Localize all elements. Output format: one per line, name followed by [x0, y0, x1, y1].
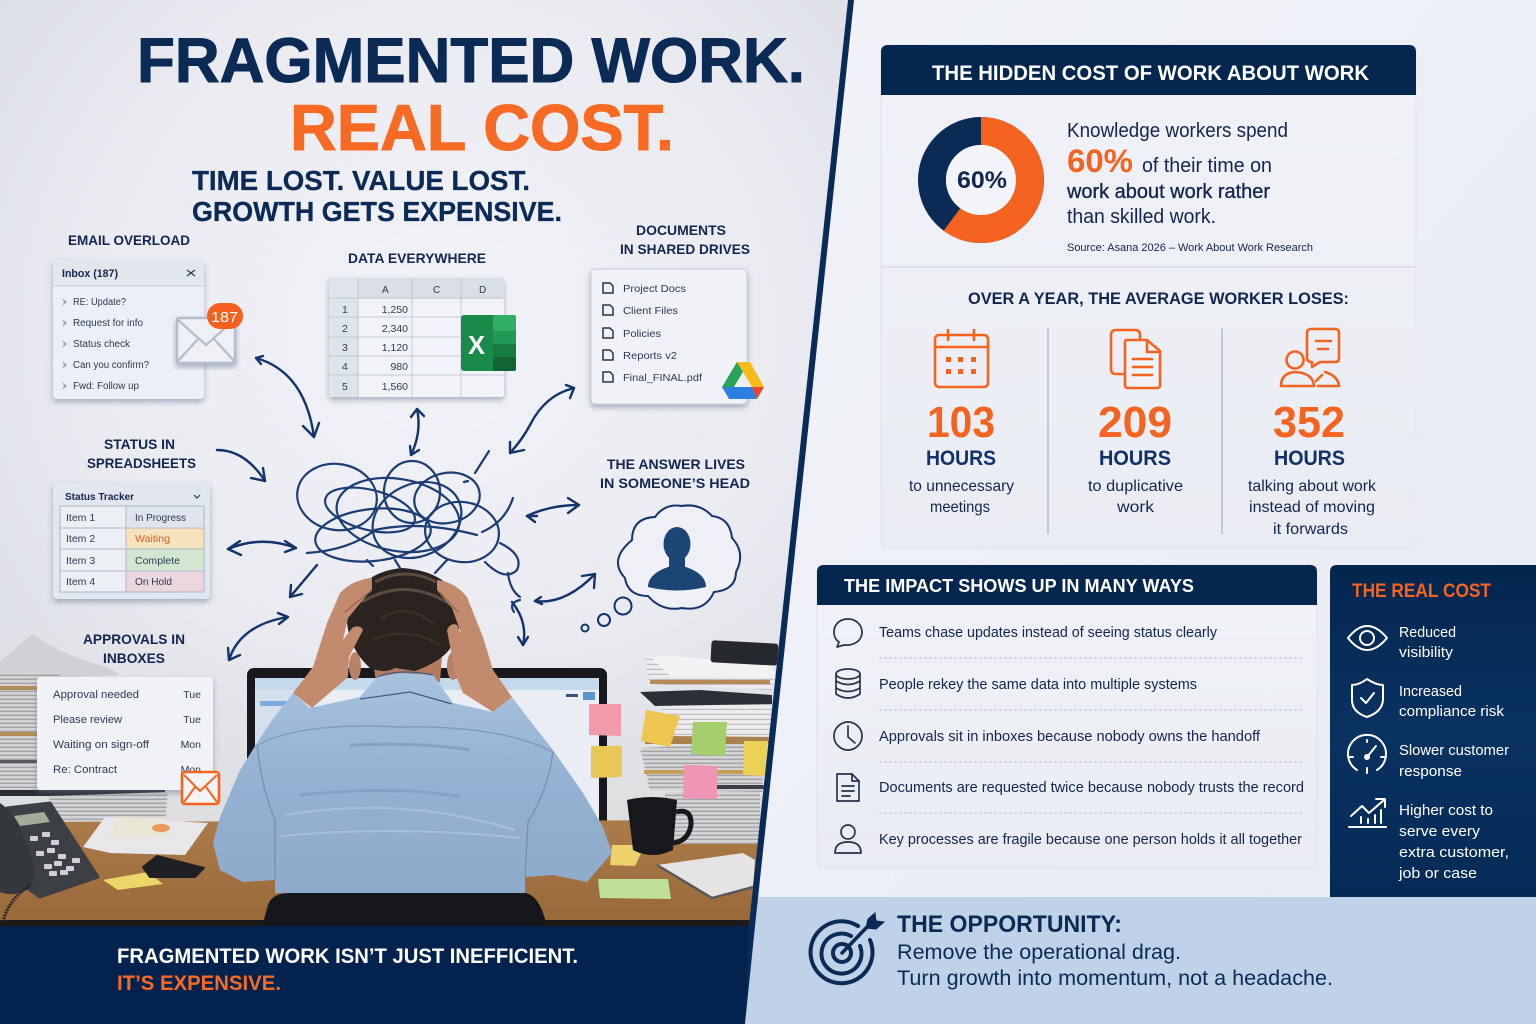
neck and ears	[349, 652, 459, 682]
left hand and forearm	[293, 578, 372, 708]
title	[137, 26, 805, 164]
title: FRAGMENTED WORK.	[137, 26, 805, 96]
illustration: right paper stacks and notebook	[640, 640, 779, 844]
label: the answer lives in someone's head: IN SOMEONE’S HEAD	[600, 475, 750, 491]
label: status in spreadsheets	[87, 440, 196, 468]
stat: 103 hours: to unnecessary	[909, 478, 1014, 495]
panel: shared drive files: Final_FINAL.pdf	[623, 372, 702, 384]
row: key processes	[835, 825, 1302, 853]
panel: spreadsheet: 2	[342, 323, 348, 335]
label: email overload: EMAIL OVERLOAD	[68, 232, 190, 248]
icon: orange envelope	[182, 772, 219, 804]
illustration: notebook	[657, 853, 755, 898]
text: knowledge workers statistic: Source: Asana 2026 – Work About Work Research	[1067, 242, 1313, 254]
panel: the hidden cost of work about work	[881, 45, 1416, 548]
item: increased compliance risk: Increased	[1399, 684, 1462, 700]
panel: the opportunity: Turn growth into momentum, not a headache.	[897, 967, 1333, 990]
label: documents in shared drives: IN SHARED DRIVES	[620, 241, 750, 257]
left panel: fragmented work scene	[0, 0, 848, 926]
bottom banner: left	[0, 926, 750, 1024]
panel: approvals inbox: Tue	[183, 689, 201, 701]
panel: approvals inbox: Mon	[181, 739, 201, 751]
panel: inbox window: Request for info	[73, 318, 143, 329]
text: knowledge workers statistic: than skilled work.	[1067, 206, 1216, 228]
text: knowledge workers statistic: Knowledge workers spend	[1067, 120, 1288, 142]
stat: 209 hours: 209	[1098, 398, 1172, 447]
item: reduced visibility: visibility	[1399, 645, 1454, 661]
illustration: monitor	[247, 668, 607, 820]
panel: inbox window: Fwd: Follow up	[73, 381, 139, 392]
panel: spreadsheet: 2,340	[382, 323, 408, 335]
hair	[347, 568, 461, 671]
chart: 60 percent donut	[932, 131, 1030, 229]
panel: status tracker	[53, 483, 210, 599]
stat: 209 hours: work	[1116, 499, 1155, 516]
item: reduced visibility: Reduced	[1399, 625, 1456, 641]
arrow: knot down	[512, 602, 528, 645]
panel: spreadsheet: 980	[390, 361, 408, 373]
panel: spreadsheet: 5	[342, 381, 348, 393]
arrow: thought bubble	[535, 574, 595, 604]
chart: 60 percent donut: 60%	[957, 167, 1007, 194]
panel: the opportunity: THE OPPORTUNITY:	[897, 911, 1122, 938]
item: reduced visibility	[1348, 625, 1456, 661]
item: higher cost to serve: extra customer,	[1399, 845, 1509, 861]
row: rekey data: People rekey the same data into multiple systems	[879, 677, 1197, 693]
row: chase updates	[834, 619, 1218, 647]
panel: approvals inbox: Mon	[181, 764, 201, 776]
panel: shared drive files	[591, 269, 747, 404]
arrow: knot to status	[228, 541, 296, 555]
item: higher cost to serve	[1349, 799, 1509, 882]
panel: status tracker: Status Tracker	[65, 491, 134, 503]
panel: shared drive files: Policies	[623, 328, 661, 340]
panel: the opportunity	[745, 897, 1536, 1024]
label: approvals in inboxes	[83, 634, 184, 663]
stat: 352 hours	[1248, 329, 1377, 538]
icon: excel logo: X	[468, 330, 486, 360]
panel: status tracker: Item 4	[66, 576, 95, 588]
illustration: office chair	[264, 893, 546, 920]
panel: inbox window: RE: Update?	[73, 297, 126, 308]
item: increased compliance risk: compliance risk	[1399, 704, 1505, 720]
panel: spreadsheet: 1	[342, 304, 348, 316]
panel: spreadsheet: D	[479, 285, 486, 296]
stat: 103 hours: HOURS	[926, 447, 996, 470]
heading: over a year: OVER A YEAR, THE AVERAGE WORKER LOSES:	[968, 289, 1349, 308]
label: data everywhere: DATA EVERYWHERE	[348, 250, 486, 266]
stat: 352 hours: HOURS	[1274, 447, 1345, 470]
shirt	[213, 672, 612, 893]
heading: THE REAL COST	[1352, 581, 1491, 602]
panel: the real cost	[1330, 565, 1536, 897]
label: status in spreadsheets: STATUS IN	[104, 436, 175, 452]
illustration: desk	[0, 820, 770, 927]
panel: approvals inbox: Re: Contract	[53, 764, 117, 776]
panel: the opportunity: Remove the operational drag.	[897, 941, 1181, 964]
illustration: sticky notes	[103, 704, 768, 899]
illustration: desk phone	[0, 803, 98, 922]
arrow: approvals two-way	[228, 613, 288, 660]
bottom banner: left: IT’S EXPENSIVE.	[117, 972, 281, 995]
diagonal divider	[745, 0, 854, 1024]
panel: inbox window	[53, 260, 204, 399]
stat: 209 hours	[1088, 330, 1183, 516]
panel: approvals inbox: Approval needed	[53, 689, 139, 701]
label: approvals in inboxes: APPROVALS IN	[83, 631, 185, 647]
text: knowledge workers statistic	[1066, 120, 1313, 254]
stat: 209 hours: HOURS	[1099, 447, 1171, 470]
panel: approvals inbox: Please review	[53, 714, 122, 726]
arrow: knot to approvals short	[290, 565, 317, 597]
stat: 103 hours: 103	[927, 398, 995, 447]
row: rekey data	[836, 669, 1197, 698]
title: REAL COST.	[290, 91, 674, 164]
item: increased compliance risk	[1352, 679, 1505, 720]
row: documents	[837, 774, 1304, 801]
panel: spreadsheet: 1,560	[382, 381, 408, 393]
text: knowledge workers statistic: of their time on	[1142, 155, 1272, 177]
icon: envelope with 187 badge: 187	[211, 309, 238, 326]
label: documents in shared drives	[620, 226, 750, 254]
stat: 352 hours: instead of moving	[1249, 499, 1375, 516]
item: higher cost to serve: serve every	[1399, 824, 1481, 840]
panel: status tracker: Waiting	[135, 533, 170, 545]
item: higher cost to serve: job or case	[1398, 866, 1477, 882]
row: key processes: Key processes are fragile because one person holds it all together	[879, 832, 1302, 848]
stat: 103 hours	[909, 330, 1014, 516]
illustration: desk papers and wallet	[83, 817, 208, 877]
panel: status tracker: In Progress	[135, 512, 186, 524]
stat: 209 hours: to duplicative	[1088, 478, 1183, 495]
arrow: spreadsheet two-way	[410, 409, 424, 455]
panel: shared drive files: Project Docs	[623, 283, 686, 295]
arrow: documents two-way	[510, 385, 574, 453]
item: slower customer response: response	[1399, 764, 1462, 780]
panel: approvals inbox: Waiting on sign-off	[53, 739, 150, 751]
panel: spreadsheet: 1,250	[382, 304, 408, 316]
row: approvals: Approvals sit in inboxes because nobody owns the handoff	[879, 729, 1261, 745]
row: documents: Documents are requested twice because nobody trusts the record	[879, 780, 1304, 796]
illustration: coffee mug	[627, 797, 691, 855]
subtitle	[192, 165, 562, 227]
icon: thought bubble with person	[582, 505, 740, 632]
panel: the impact shows up in many ways	[817, 565, 1317, 868]
panel: inbox window: Status check	[73, 339, 131, 350]
label: status in spreadsheets: SPREADSHEETS	[87, 455, 196, 471]
panel: approvals inbox: Tue	[183, 714, 201, 726]
text: knowledge workers statistic: 60%	[1067, 143, 1133, 179]
icon: envelope with 187 badge	[177, 303, 243, 363]
heading: THE IMPACT SHOWS UP IN MANY WAYS	[844, 576, 1194, 596]
stat: 352 hours: it forwards	[1273, 521, 1348, 538]
text: knowledge workers statistic: work about work rather	[1066, 181, 1270, 203]
panel: spreadsheet: 4	[342, 361, 348, 373]
panel: approvals inbox	[37, 677, 213, 790]
panel: status tracker: Item 3	[66, 555, 95, 567]
arrow: email to knot	[256, 356, 319, 437]
stat: 352 hours: 352	[1273, 398, 1345, 447]
row: chase updates: Teams chase updates instead of seeing status clearly	[879, 625, 1218, 641]
panel: status tracker: Item 1	[66, 512, 95, 524]
arrow: status to knot	[217, 450, 265, 481]
panel: status tracker: On Hold	[135, 576, 172, 588]
panel: spreadsheet: 3	[342, 342, 348, 354]
panel: inbox window: Can you confirm?	[73, 360, 149, 371]
stat: 103 hours: meetings	[930, 499, 990, 516]
icon: target with arrow	[811, 913, 884, 983]
scribble: tangled knot of work	[292, 451, 520, 612]
panel: shared drive files: Reports v2	[623, 350, 677, 362]
panel: inbox window: Inbox (187)	[62, 268, 118, 280]
subtitle: TIME LOST. VALUE LOST.	[192, 165, 530, 196]
panel: spreadsheet: 1,120	[382, 342, 408, 354]
panel: spreadsheet: A	[382, 285, 389, 296]
panel: spreadsheet	[329, 278, 504, 397]
arrow: answer two-way	[527, 498, 579, 522]
panel: status tracker: Complete	[135, 555, 180, 567]
stat: 352 hours: talking about work	[1248, 478, 1377, 495]
item: slower customer response	[1348, 735, 1509, 780]
row: approvals	[834, 722, 1261, 750]
right side background	[700, 0, 1536, 1024]
heading: THE HIDDEN COST OF WORK ABOUT WORK	[932, 62, 1369, 85]
label: the answer lives in someone's head: THE ANSWER LIVES	[607, 456, 745, 472]
illustration: stressed man at desk	[213, 568, 612, 893]
panel: status tracker: Item 2	[66, 533, 95, 545]
label: documents in shared drives: DOCUMENTS	[636, 222, 726, 238]
panel: spreadsheet: C	[433, 285, 440, 296]
icon: google drive logo	[722, 362, 764, 399]
illustration: left paper stack	[0, 634, 168, 830]
label: approvals in inboxes: INBOXES	[103, 650, 165, 666]
item: slower customer response: Slower customer	[1399, 743, 1509, 759]
right hand and forearm	[437, 580, 512, 712]
icon: excel logo	[461, 315, 516, 371]
subtitle: GROWTH GETS EXPENSIVE.	[192, 196, 562, 227]
bottom banner: left: FRAGMENTED WORK ISN’T JUST INEFFICIENT.	[117, 945, 578, 968]
label: the answer lives in someone's head	[600, 460, 750, 488]
panel: shared drive files: Client Files	[623, 305, 678, 317]
item: higher cost to serve: Higher cost to	[1399, 803, 1493, 819]
